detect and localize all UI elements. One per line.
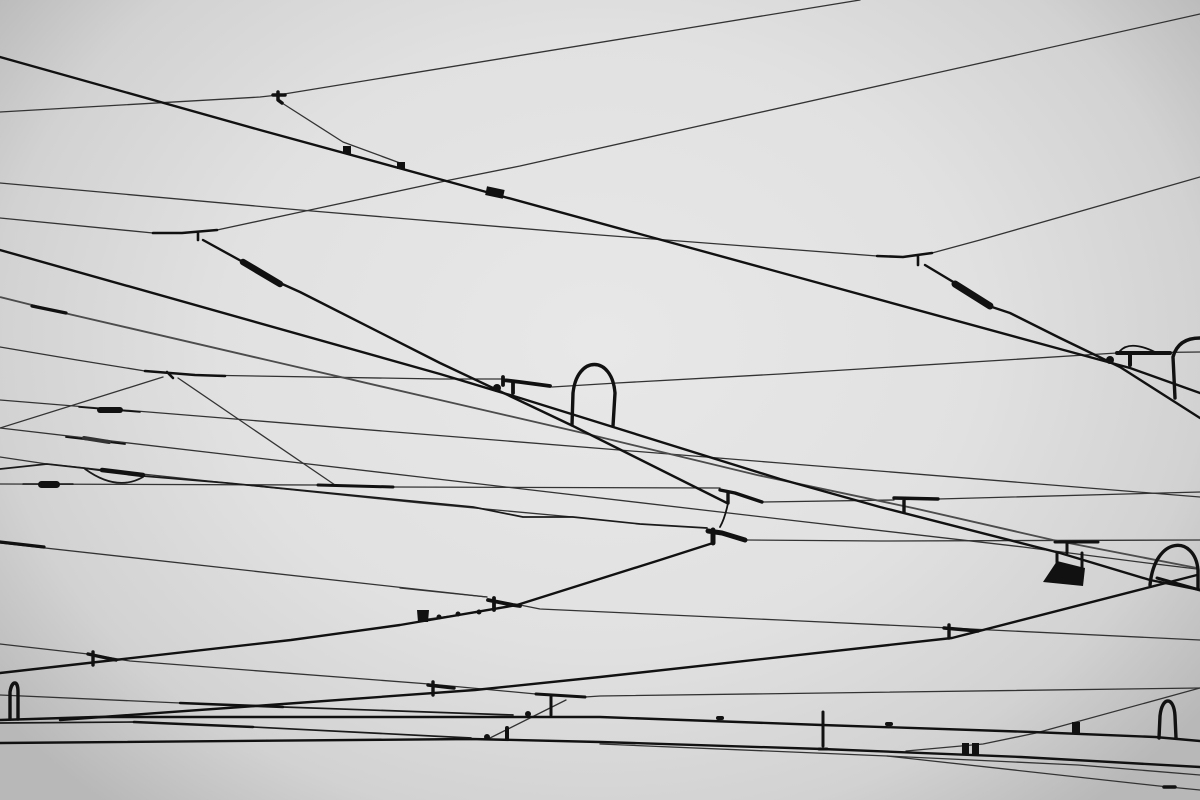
fitting: strut under lower hoop (1157, 578, 1200, 590)
fitting: central bump (493, 384, 501, 392)
fitting: bump one (716, 716, 724, 720)
fitting: far left tensioner (32, 306, 66, 313)
fitting: box on main wire (485, 186, 505, 199)
fitting: lower centre clamp (708, 530, 745, 543)
hoops (10, 338, 1200, 738)
fitting: centre left hanger (145, 371, 225, 378)
fitting: upper right loop (1120, 346, 1155, 352)
fitting: link between clamps (720, 503, 728, 527)
fitting: insulator one (79, 407, 140, 413)
fitting: bottom clamp two (536, 694, 585, 715)
fitting: bottom right tag (1164, 785, 1175, 789)
hoop: upper right arch (1173, 338, 1200, 398)
fitting: clamp on main wire one (343, 146, 351, 154)
fitting: right turnbuckle (955, 284, 990, 306)
fitting: small cup (417, 610, 429, 622)
fitting: insulator two (66, 437, 125, 444)
fitting: bottom bump pair (484, 711, 531, 740)
fitting: right low clamp (944, 625, 978, 638)
hoop: lower right arch (1150, 545, 1198, 588)
lamp (1043, 561, 1085, 586)
beaded wire (0, 297, 1197, 568)
fitting: tensioner far left (0, 542, 44, 547)
fitting: bottom strain one (180, 703, 283, 707)
fitting: left hanger (153, 230, 217, 240)
fitting: double clamp (962, 743, 979, 755)
fitting: bottom strain two (134, 722, 253, 727)
fitting: bottom clamp one (428, 682, 454, 695)
fitting: clamp on main wire two (397, 162, 405, 169)
fitting: left low clamp (88, 652, 116, 665)
fitting: bump two (885, 722, 893, 726)
fitting: bump three (1072, 722, 1080, 733)
fitting: left turnbuckle (243, 262, 280, 284)
medium wires (0, 464, 707, 738)
fitting: post (819, 712, 827, 749)
fitting: right centre clamp (894, 498, 938, 512)
fitting: clamp right of centre (720, 490, 762, 503)
fitting: upper right clamp (1117, 353, 1170, 365)
fitting: central clamp (503, 377, 550, 393)
fitting: mid wire strain (318, 485, 393, 487)
fitting: bottom clamp three (505, 728, 509, 739)
hoop: centre arch (572, 364, 615, 426)
fitting: upper left clamp (273, 92, 285, 103)
fitting: insulator four (23, 481, 73, 488)
fitting: lamp bracket (1055, 542, 1098, 568)
fitting: insulator three (102, 470, 143, 475)
hoop: lower far right arch (1159, 701, 1176, 738)
fitting: upper right bump (1106, 356, 1114, 364)
fitting: beads (436, 610, 482, 620)
hoop: far left small arch (10, 683, 18, 719)
fitting: clamp centre low (488, 598, 520, 610)
fitting: right hanger (877, 253, 932, 265)
